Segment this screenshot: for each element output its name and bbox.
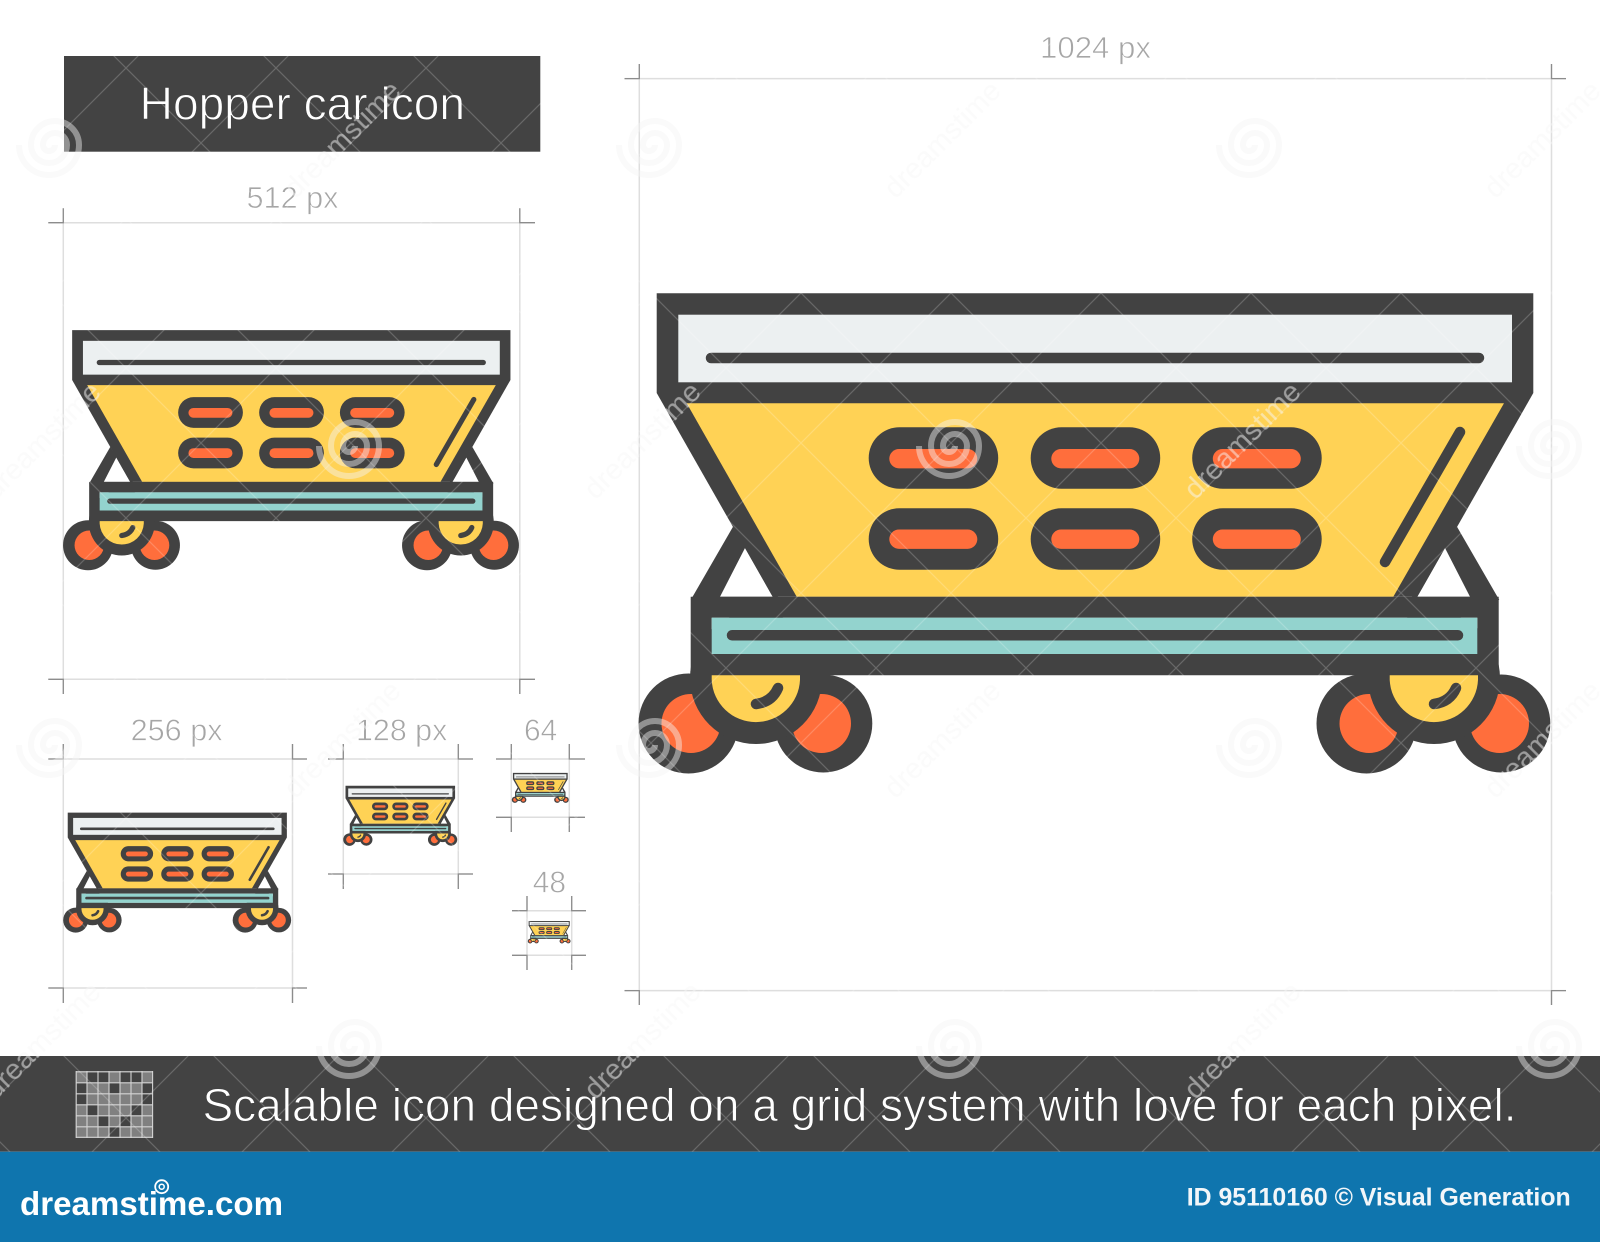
title banner — [64, 56, 540, 152]
size frame: 128 px: 128 px — [356, 713, 448, 748]
size frame: 48 px — [512, 865, 586, 970]
watermark text: dreamstime — [578, 376, 708, 506]
watermark text: dreamstime — [878, 675, 1008, 805]
watermark text: dreamstime — [1178, 376, 1308, 506]
grid system banner — [0, 1056, 1600, 1152]
icon: pixel grid — [76, 1071, 153, 1138]
size frame: 64 px — [496, 713, 585, 832]
footer bar — [0, 1152, 1600, 1242]
size frame: 48 px: 48 — [533, 865, 566, 900]
hopper car icon: 48 px — [528, 921, 571, 943]
size frame: 128 px — [328, 713, 473, 889]
watermark text: dreamstime — [878, 75, 1008, 205]
footer logo: dreamstime.com — [20, 1185, 283, 1222]
hopper car icon: 128 px — [343, 786, 457, 846]
title banner: Hopper car icon — [140, 77, 465, 129]
hopper car icon: 512 px — [63, 330, 519, 570]
size frame: 256 px: 256 px — [131, 713, 223, 748]
size frame: 256 px — [48, 713, 307, 1003]
hopper car icon: 256 px — [63, 813, 291, 933]
size frame: 1024 px: 1024 px — [1040, 30, 1151, 65]
tagline: Scalable icon designed on a grid system with love for each pixel. — [202, 1079, 1516, 1131]
watermark text: dreamstime — [1178, 976, 1308, 1106]
watermark spirals — [19, 121, 1579, 1076]
hopper car icon: 1024 px — [638, 293, 1550, 774]
watermark text: dreamstime — [278, 75, 408, 205]
size frame: 512 px: 512 px — [246, 180, 339, 215]
watermark text: dreamstime — [278, 675, 408, 805]
hopper car icon: 64 px — [512, 773, 569, 803]
size frame: 512 px — [48, 180, 535, 694]
watermark text: dreamstime — [578, 976, 708, 1106]
size frame: 64 px: 64 — [524, 713, 557, 748]
image credit: ID 95110160 © Visual Generation — [1187, 1184, 1571, 1212]
